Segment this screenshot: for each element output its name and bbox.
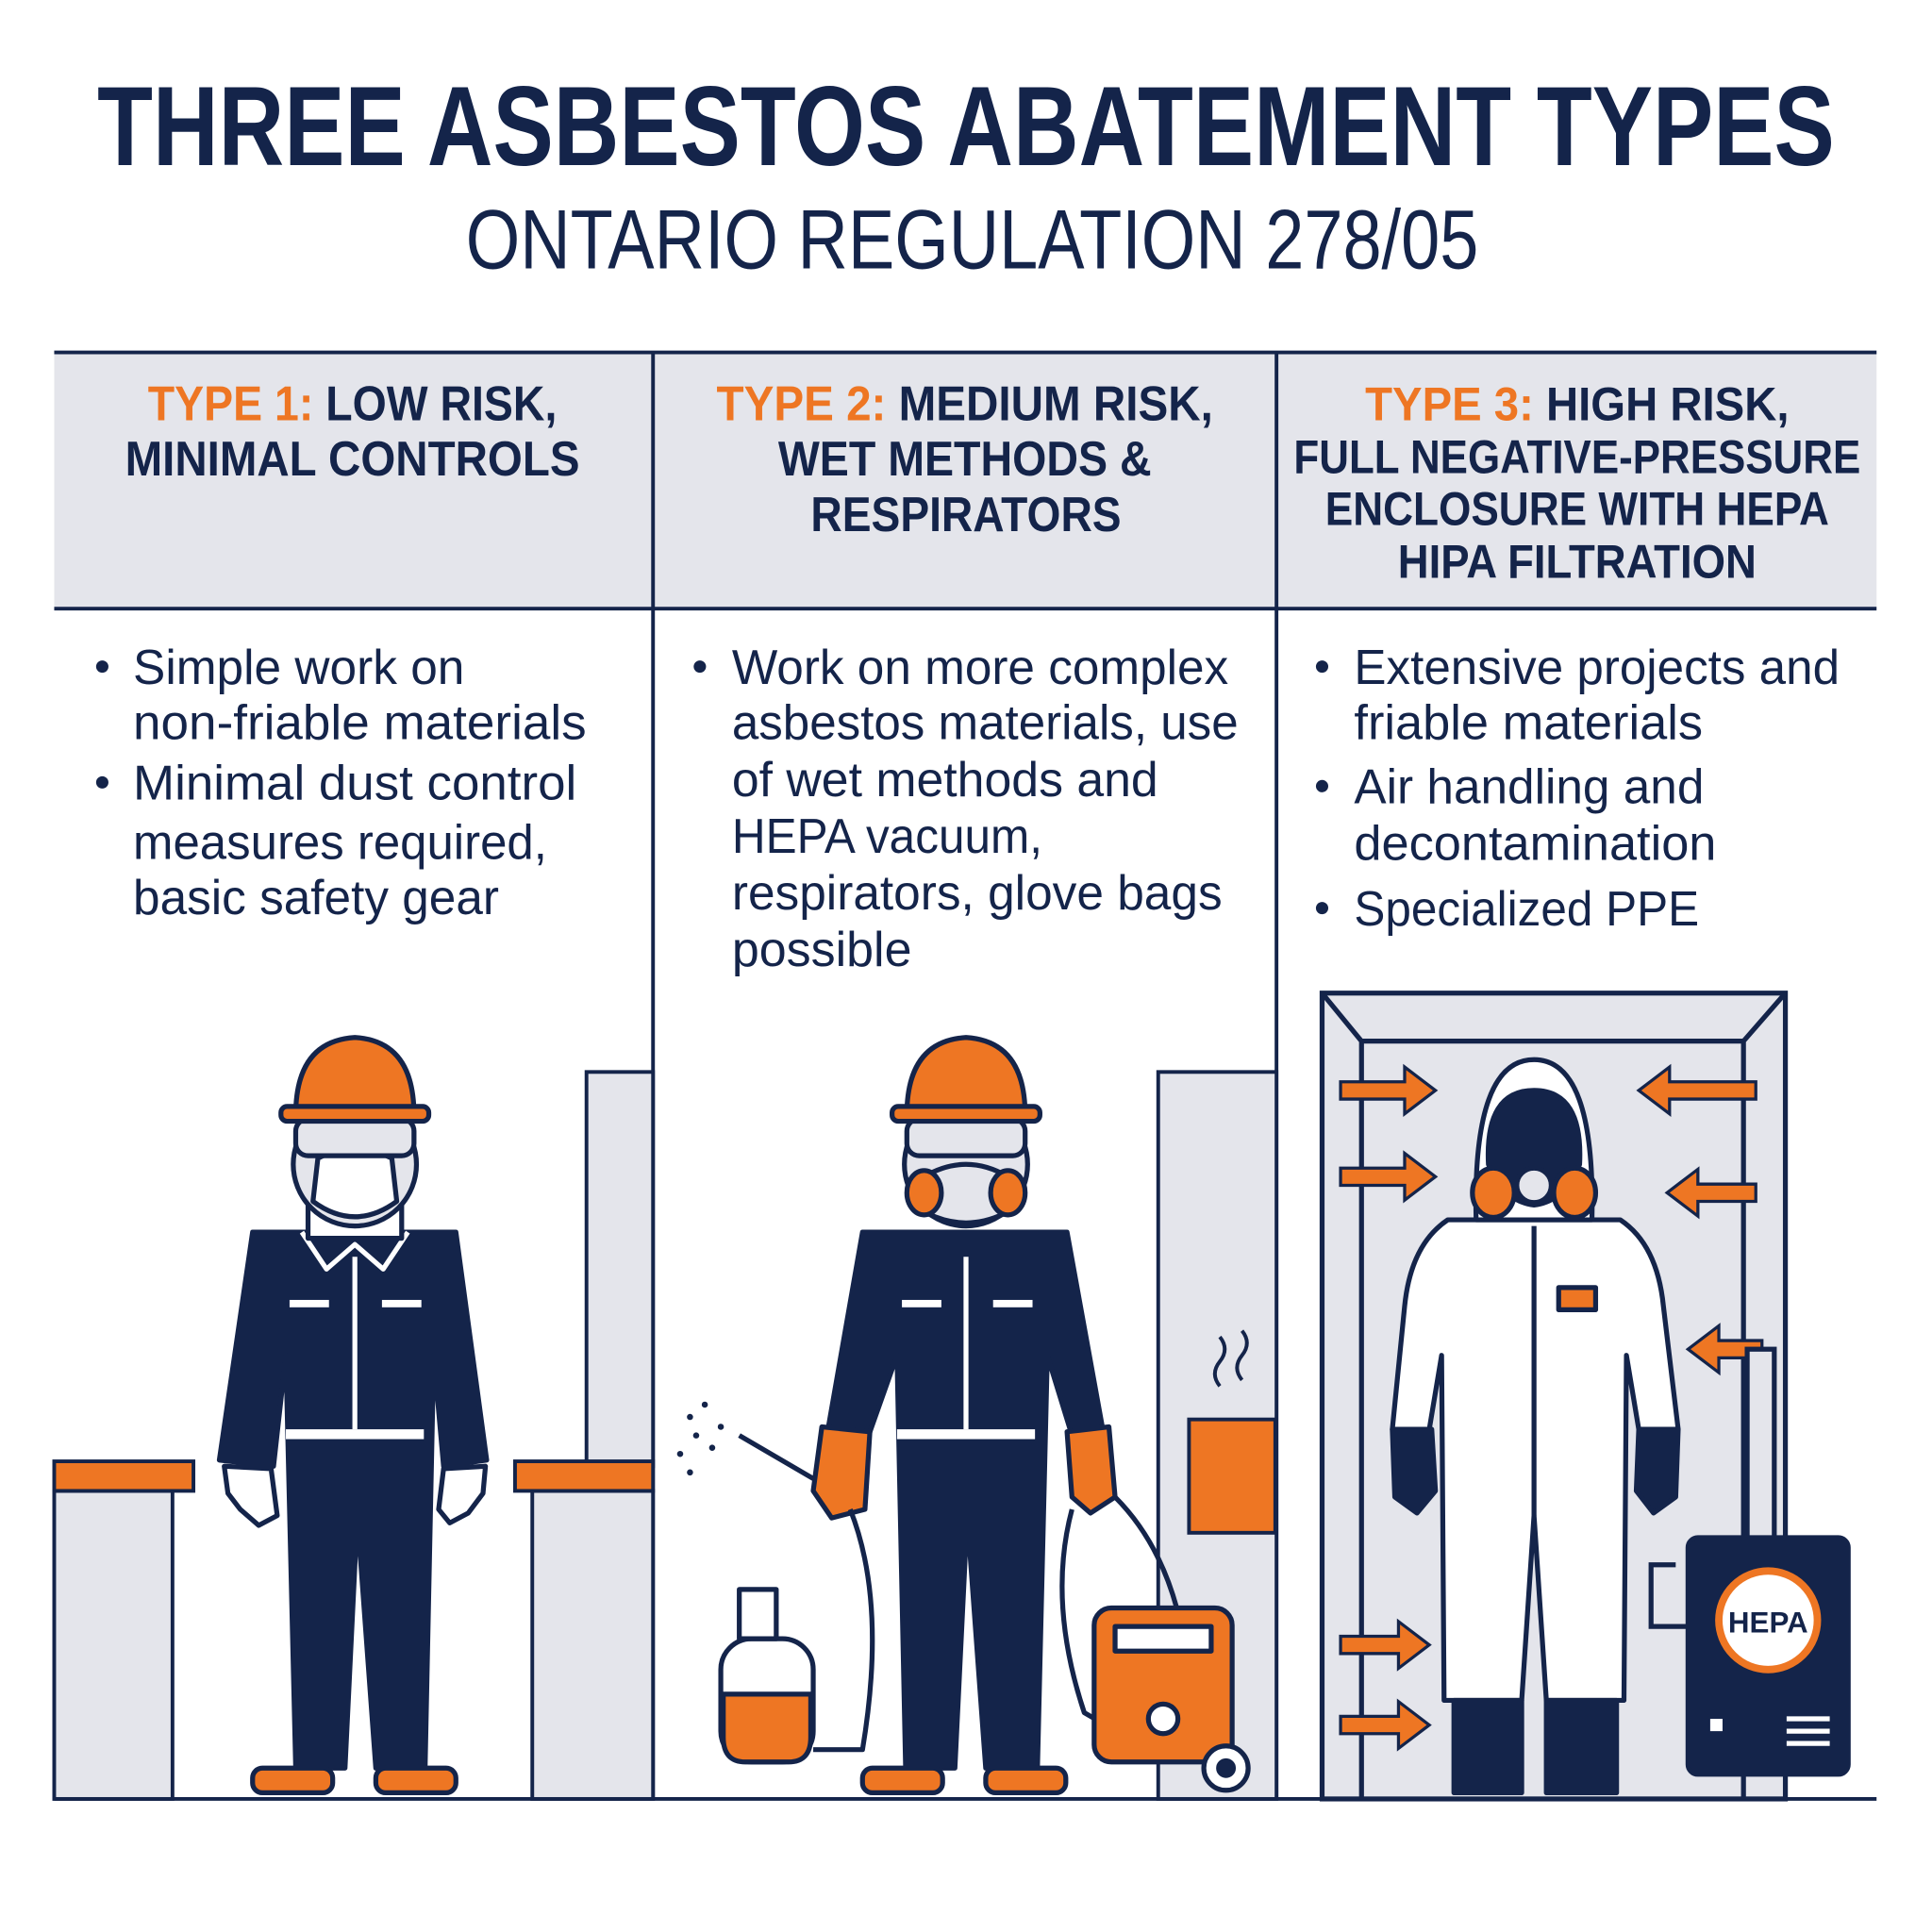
bullets: type 1: measures required, — [133, 815, 547, 870]
bullets: type 3: decontamination — [1354, 817, 1716, 872]
spray mist — [677, 1402, 724, 1475]
airflow arrows — [1341, 1067, 1762, 1748]
HEPA unit: HEPA — [1728, 1607, 1808, 1640]
bullets: type 2 — [693, 641, 1239, 977]
bullets: type 2: HEPA vacuum, — [732, 809, 1042, 864]
header: type 3: TYPE 3: HIGH RISK, — [1365, 377, 1789, 430]
bullets: type 3: Extensive projects and — [1354, 641, 1840, 695]
bullets: type 1: non-friable materials — [133, 696, 587, 751]
header: type 2: TYPE 2: MEDIUM RISK, — [717, 376, 1213, 431]
scene: type 2 background — [1158, 1072, 1276, 1799]
bullets: type 2: of wet methods and — [732, 753, 1158, 808]
header: type 1 — [125, 376, 580, 487]
bullets: type 3: Specialized PPE — [1354, 882, 1699, 937]
bullets: type 3 — [1316, 641, 1840, 937]
bullets: type 2: Work on more complex — [732, 641, 1228, 695]
HEPA unit — [1651, 1349, 1848, 1774]
bullets: type 2: possible — [732, 923, 912, 977]
bullets: type 1 — [96, 641, 587, 925]
worker 2 with sprayer and vacuum — [721, 1038, 1248, 1792]
header: type 1: TYPE 1: LOW RISK, — [148, 376, 557, 431]
scene: type 1 background counters — [54, 1072, 653, 1799]
subtitle: ONTARIO REGULATION 278/05 — [466, 193, 1478, 287]
header: type 3: HIPA FILTRATION — [1398, 536, 1757, 589]
table header background — [54, 353, 1876, 608]
header: type 2 — [717, 376, 1213, 542]
header: type 2: RESPIRATORS — [810, 488, 1122, 542]
header: type 3: ENCLOSURE WITH HEPA — [1325, 482, 1829, 535]
bullets: type 2: respirators, glove bags — [732, 866, 1223, 921]
header: type 1: MINIMAL CONTROLS — [125, 432, 580, 487]
bullets: type 1: basic safety gear — [133, 871, 499, 925]
bullets: type 3: friable materials — [1354, 696, 1703, 751]
bullets: type 1: Simple work on — [133, 641, 464, 695]
header: type 2: WET METHODS & — [778, 432, 1152, 487]
bullets: type 3: Air handling and — [1354, 760, 1704, 815]
bullets: type 2: asbestos materials, use — [732, 696, 1239, 751]
enclosure — [1322, 993, 1786, 1799]
worker 1 — [219, 1038, 487, 1792]
worker 3 in white suit — [1392, 1059, 1678, 1792]
header: type 3 — [1293, 377, 1860, 589]
bullets: type 1: Minimal dust control — [133, 757, 576, 811]
header: type 3: FULL NEGATIVE-PRESSURE — [1293, 431, 1860, 484]
